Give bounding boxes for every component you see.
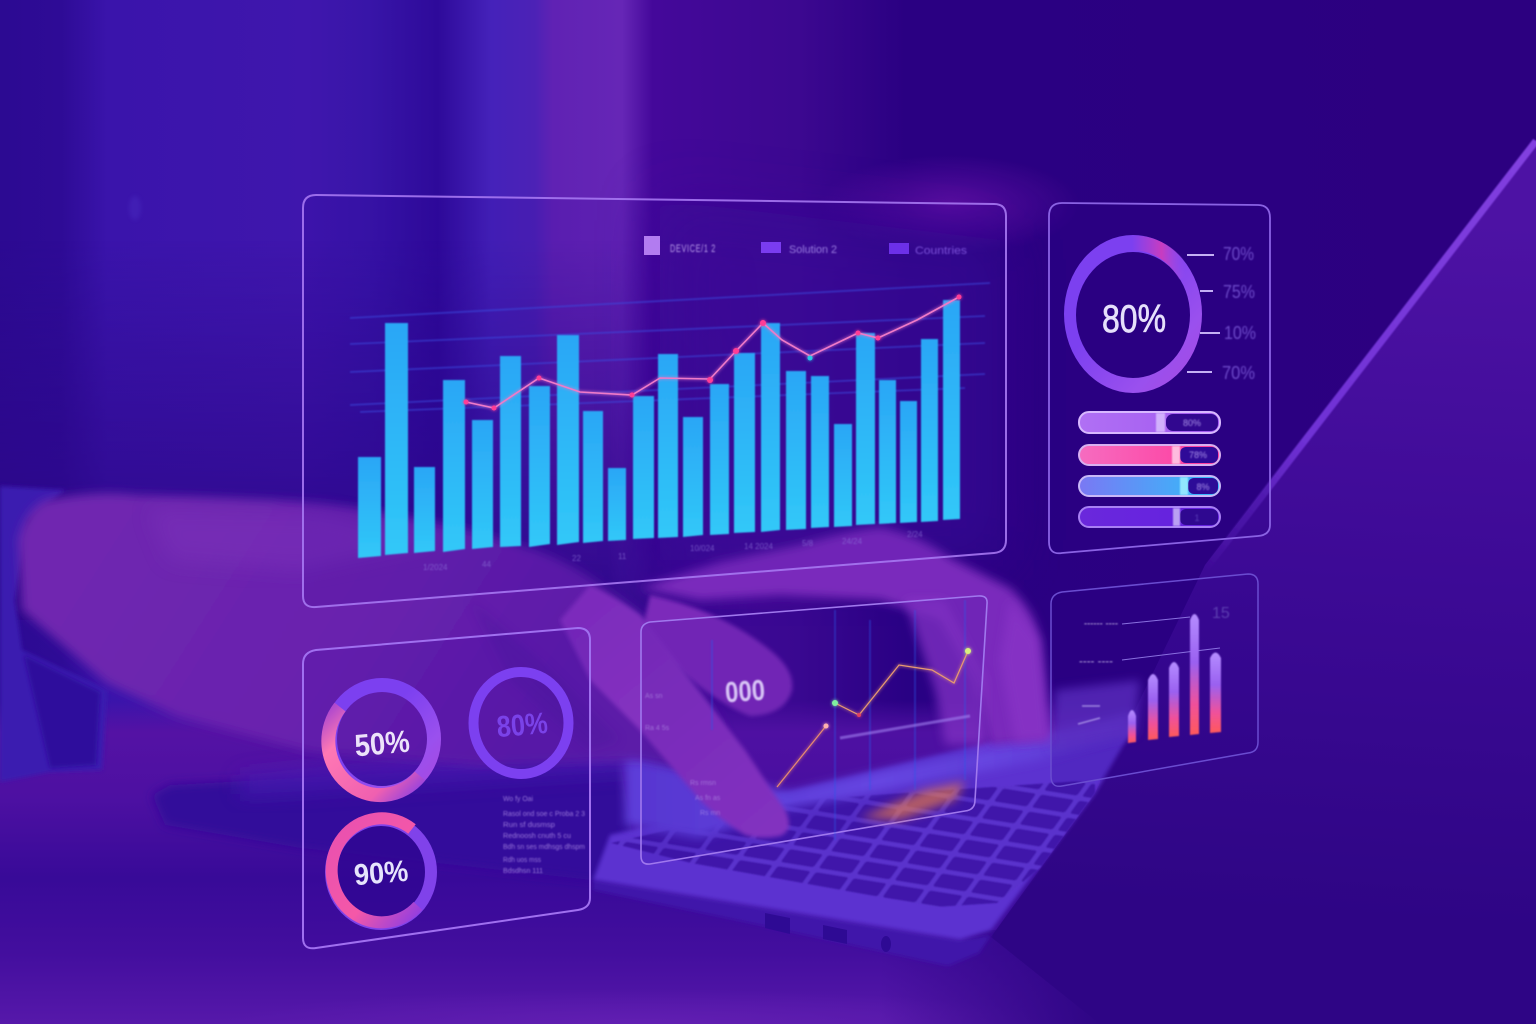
axis labels: 24/24 [842,537,863,546]
axis labels: 22 [572,554,581,563]
mini chart labels: 15 [1212,605,1230,622]
shirt buttons [129,196,141,220]
axis labels: 11 [618,552,627,561]
grid lines [350,283,990,412]
donut 90% [331,818,431,924]
shirt shadow fade [19,300,686,620]
small panel notes: As sn [645,693,663,700]
grid columns [712,600,965,840]
small panel notes: As fn as [695,795,721,802]
mini chart labels [1078,605,1230,724]
small description text: Rdh uos mss [503,857,541,864]
line chart [777,648,971,787]
hands [18,493,1050,838]
counter: 000 [724,675,766,709]
donut 80%: 80% [495,707,549,744]
lid edge highlight [1205,141,1536,570]
small panel notes [645,693,721,817]
small description text: Bdsdhsn 111 [503,868,543,875]
small description text [503,796,585,875]
donut callout labels: 70% [1222,363,1255,383]
panel: three donuts [303,628,590,948]
ports [765,913,790,934]
legend [644,236,968,257]
progress bars: 1 [1194,513,1200,523]
donut callout labels: 75% [1223,282,1255,302]
mini chart labels: ---- ---- [1079,657,1113,666]
bars [358,300,960,558]
background photo: person typing on laptop [0,0,1100,1024]
panel: line chart over keyboard [641,596,987,864]
back of hand [18,493,740,780]
axis labels: 10/024 [690,544,715,553]
small panel notes: Rs mn [700,810,720,817]
progress bars: 8% [1196,482,1210,492]
axis labels: 1/2024 [423,563,448,572]
front wall [593,880,991,966]
small description text: Run sf dusmsp [503,822,555,829]
legend: Solution 2 [789,244,837,256]
orange reflection [860,782,965,820]
axis labels: 5/8 [802,539,814,548]
progress bars [1079,412,1220,527]
large donut 80%: 80% [1102,298,1166,341]
legend: DEVICE/1 2 [670,243,716,255]
pressing fingertip [560,585,789,838]
second finger [640,595,792,716]
donut callout labels: 10% [1224,323,1256,343]
donut 50%: 50% [353,724,411,763]
small description text: Wo fy Oai [503,796,533,803]
axis labels: 44 [482,560,491,569]
shirt cuff [0,486,107,782]
progress bars: 80% [1183,418,1201,428]
table [0,700,1100,1024]
mini chart labels: ------ ---- [1084,619,1118,628]
donut callout labels: 70% [1223,244,1254,264]
keyboard [611,780,1095,907]
panel: mini bar chart [1051,574,1258,786]
small panel notes: Ra 4 5s [645,725,670,732]
progress bars: 78% [1189,450,1207,460]
subtitle strip [840,716,970,738]
donut 90%: 90% [353,855,409,892]
donut 50% [328,685,434,795]
deck [593,725,1135,940]
legend: Countries [915,245,968,257]
left base [152,760,640,880]
trend line [464,294,962,410]
back knuckles [640,527,1050,745]
mini bars [1128,614,1221,743]
small description text: Rasol ond soe c Proba 2 3 [503,811,585,818]
panel: main bar chart [303,195,1006,607]
small panel notes: Rs rmsn [690,780,716,787]
laptop [152,140,1536,1024]
axis labels: 14 2024 [744,542,773,551]
small description text: Bdh sn ses mdhsgs dhspm [503,844,585,851]
axis labels [423,530,923,572]
lid back [991,140,1536,1024]
glow behind the panel [820,155,1080,255]
screen glow [625,712,1135,838]
axis labels: 2/24 [907,530,923,539]
donut 80% [474,672,568,774]
small description text: Rednoosh cnuth 5 cu [503,833,571,840]
large donut 80% [1064,235,1202,393]
panel: donut and progress bars [1049,203,1270,553]
donut callout labels [1187,244,1256,383]
